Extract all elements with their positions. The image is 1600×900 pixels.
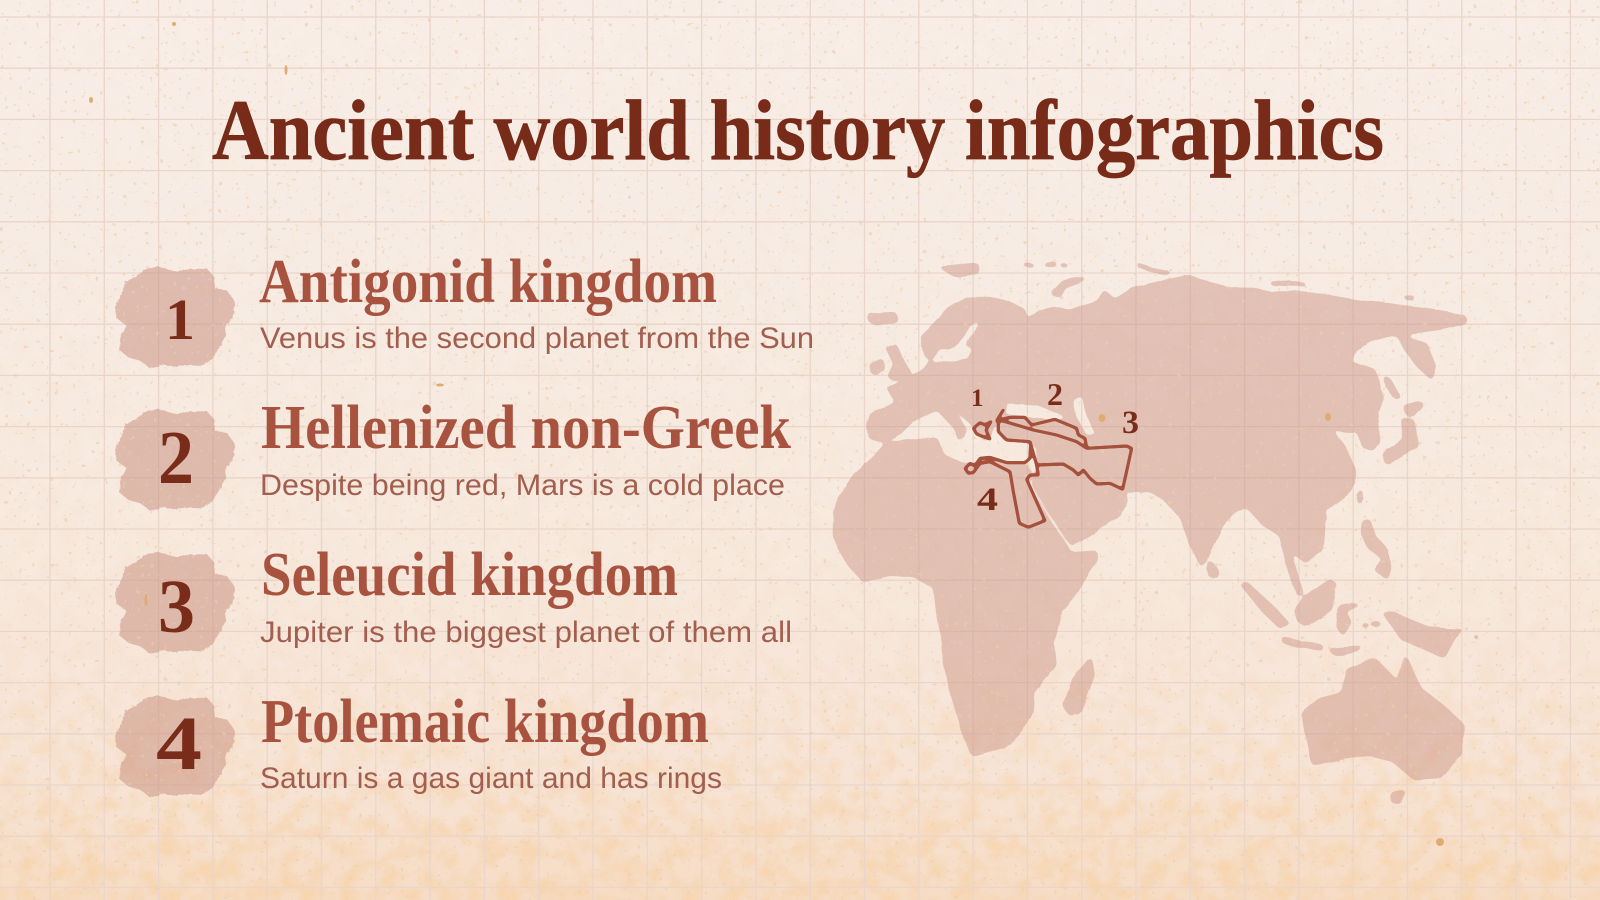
kingdom outlines on map [965,410,1132,527]
paper background [0,566,1600,900]
blob number 4: 4 [156,702,202,786]
blob number 2: 2 [158,416,194,500]
outline: Seleucid kingdom [998,421,1132,489]
map: New Guinea [1382,612,1479,658]
map: northern islands [868,261,1415,326]
outline: Hellenized non-Greek [997,410,1087,447]
map: Kamchatka and Sakhalin [1383,334,1436,399]
outline: Ptolemaic kingdom [965,443,1045,527]
item 4 text [260,688,722,795]
blob 3 [115,552,235,654]
map: Australia [1301,654,1464,804]
heading: Hellenized non-Greek: Hellenized non-Greek [261,394,791,462]
map: Philippines and Sri Lanka [1207,519,1392,580]
blob number 3: 3 [158,565,195,649]
map: British Isles [870,344,912,381]
map: Indonesia [1241,578,1380,656]
description: Jupiter: Jupiter is the biggest planet of them all [260,616,792,649]
heading: Seleucid kingdom: Seleucid kingdom [261,541,678,609]
blob number 1: 1 [165,287,195,352]
world map [833,261,1479,804]
number blobs [115,267,235,797]
map number 4: 4 [977,482,998,518]
item 2 text [260,394,791,502]
map: Madagascar [1063,656,1094,715]
title: Ancient world history infographics [212,82,1384,178]
item 3 text [260,541,792,649]
outline: Antigonid kingdom [973,422,991,439]
map number 1: 1 [971,385,984,412]
map: Japan and Taiwan [1317,401,1424,523]
blob 1 [115,267,235,368]
map number 3: 3 [1122,405,1139,441]
description: Saturn: Saturn is a gas giant and has rings [260,762,722,795]
description: Mars: Despite being red, Mars is a cold place [260,469,785,502]
description: Venus: Venus is the second planet from the Sun [260,322,814,355]
map: Africa [833,438,1098,756]
map number 2: 2 [1047,376,1063,412]
blob 4 [115,696,235,797]
heading: Ptolemaic kingdom: Ptolemaic kingdom [261,688,709,756]
blob 2 [115,409,235,511]
heading: Antigonid kingdom: Antigonid kingdom [259,248,717,316]
map: Eurasia [867,275,1466,595]
orange flecks [89,22,1444,846]
item 1 text [259,248,814,355]
